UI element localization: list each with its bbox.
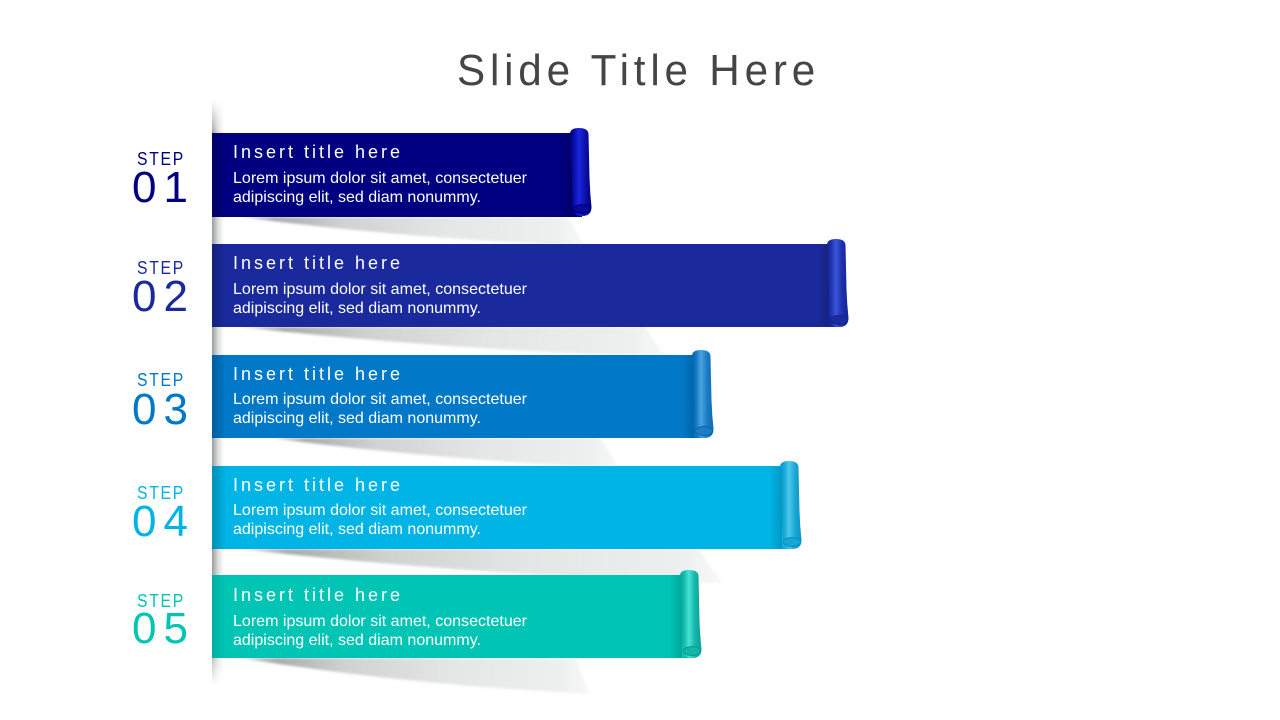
text: step 4: Lorem ipsum dolor sit amet, consectetuer [233, 502, 528, 519]
roll: step 3 [692, 350, 714, 438]
panel: step 3 [132, 350, 714, 468]
roll: step 2 [827, 239, 848, 327]
label: step 2: STEP [137, 258, 185, 278]
text: step 2: adipiscing elit, sed diam nonummy. [233, 300, 481, 317]
panel: step 1 [132, 128, 592, 246]
ribbon: step 2 [212, 244, 840, 327]
roll: step 1 [570, 128, 592, 216]
label: step 4: 04 [132, 497, 188, 546]
label: step 3: 03 [132, 385, 188, 434]
panel: step 2 [132, 239, 848, 357]
text: step 3 [233, 364, 528, 427]
ribbon: step 4 [212, 466, 794, 549]
text: step 1 [233, 142, 528, 206]
panel: step 4 [132, 461, 802, 583]
shadow: step 3 [270, 438, 620, 468]
text: step 5 [233, 585, 528, 649]
label: step 5: 05 [132, 604, 188, 653]
text: step 3: Lorem ipsum dolor sit amet, consectetuer [233, 391, 528, 408]
text: step 5: Lorem ipsum dolor sit amet, consectetuer [233, 613, 528, 630]
text: step 4 [233, 475, 528, 538]
text: step 2: Insert title here [233, 253, 400, 273]
ribbon: step 3 [212, 355, 706, 438]
label: step 1: STEP [137, 149, 185, 169]
text: step 3: Insert title here [233, 364, 400, 384]
roll: step 4 [780, 461, 802, 549]
ribbon: step 5 [212, 575, 693, 658]
text: step 3: adipiscing elit, sed diam nonummy. [233, 410, 481, 427]
text: step 1: Insert title here [233, 142, 400, 162]
label: step 3: STEP [137, 370, 185, 390]
text: step 4: Insert title here [233, 475, 400, 495]
label: step 4: STEP [137, 483, 185, 503]
label: step 5: STEP [137, 591, 185, 611]
shadow: step 5 [240, 658, 590, 694]
shadow: step 2 [240, 327, 666, 357]
text: step 1: Lorem ipsum dolor sit amet, consectetuer [233, 170, 528, 187]
panel: step 5 [132, 570, 702, 694]
label: step 1: 01 [132, 163, 188, 212]
text: step 2: Lorem ipsum dolor sit amet, consectetuer [233, 281, 528, 298]
text: step 5: Insert title here [233, 585, 400, 605]
text: step 4: adipiscing elit, sed diam nonummy. [233, 521, 481, 538]
text: step 1: adipiscing elit, sed diam nonummy. [233, 189, 481, 206]
title: Slide Title Here [457, 46, 820, 95]
ribbon: step 1 [212, 133, 582, 217]
left edge shadow [212, 103, 222, 682]
text: step 5: adipiscing elit, sed diam nonummy. [233, 632, 481, 649]
text: step 2 [233, 253, 528, 317]
label: step 2: 02 [132, 272, 188, 321]
shadow: step 4 [240, 549, 723, 583]
roll: step 5 [680, 570, 702, 658]
shadow: step 1 [240, 217, 585, 246]
